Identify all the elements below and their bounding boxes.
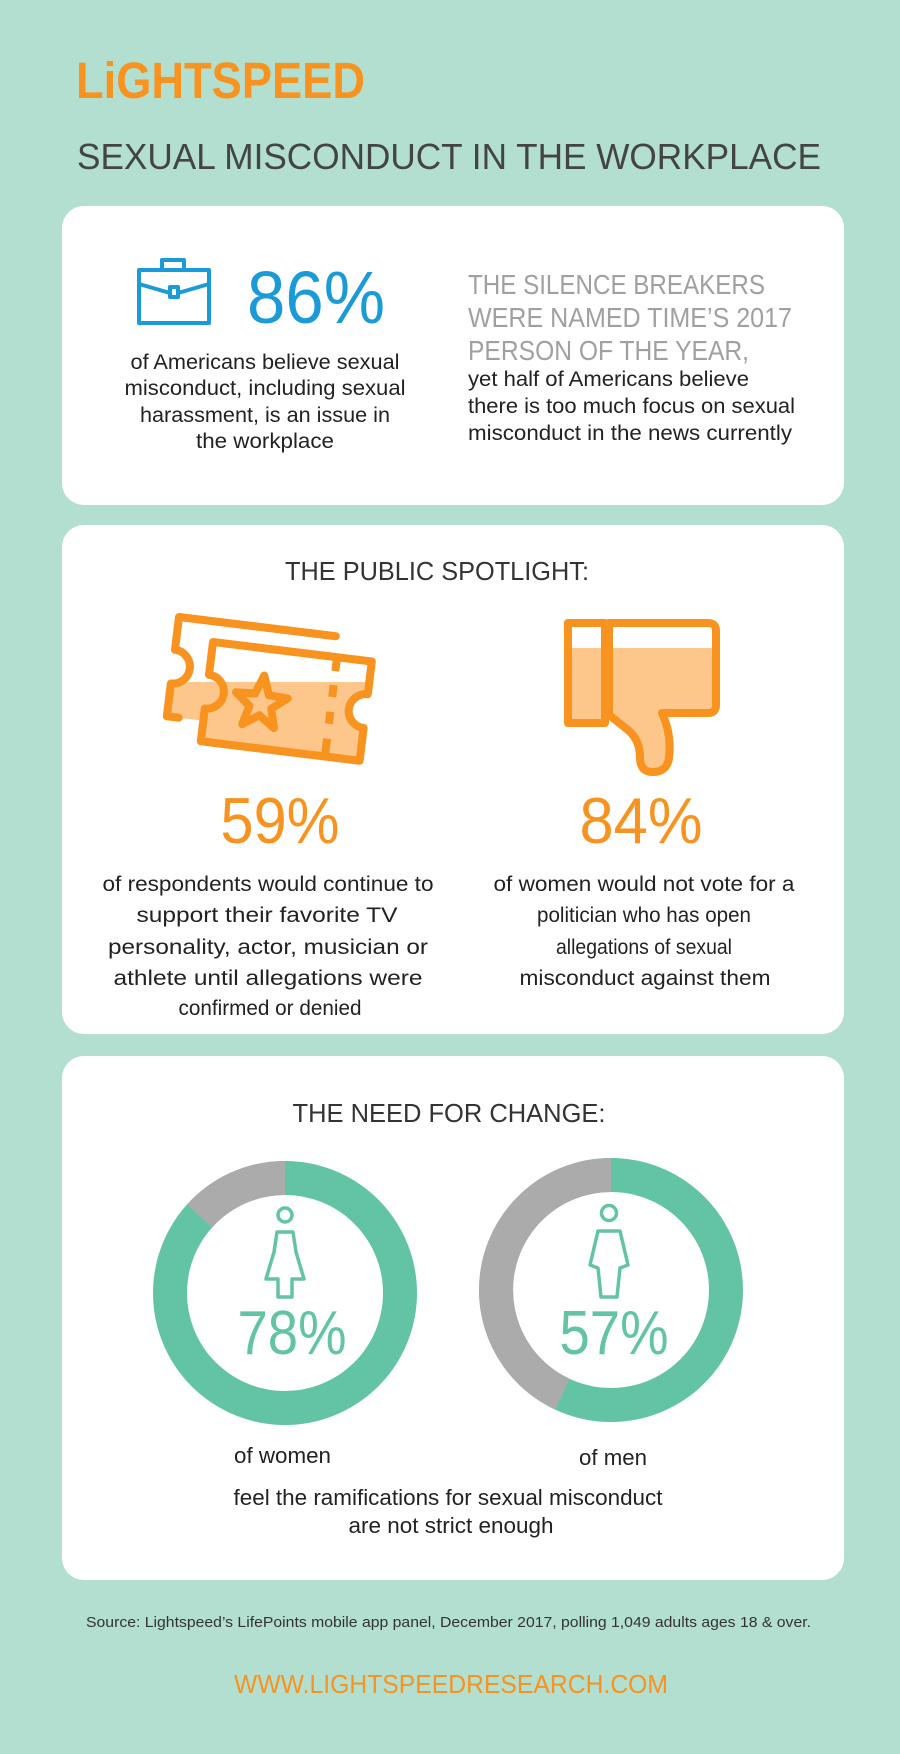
stat: 86%: 86% bbox=[247, 256, 385, 339]
label: of women: of women bbox=[234, 1443, 331, 1468]
text: conclusion bbox=[234, 1485, 662, 1538]
icon: man bbox=[590, 1206, 628, 1297]
text: silence breakers body: yet half of Americans believe bbox=[468, 368, 749, 391]
text: 59% description: support their favorite TV bbox=[136, 904, 398, 927]
icon: tickets bbox=[167, 617, 372, 761]
website url: WWW.LIGHTSPEEDRESEARCH.COM bbox=[234, 1669, 668, 1699]
text: silence breakers body: there is too much focus on sexual bbox=[468, 395, 795, 418]
stat: 57%: 57% bbox=[560, 1299, 668, 1368]
panel: intro stats bbox=[62, 206, 844, 505]
text: 86% description: misconduct, including sexual bbox=[124, 377, 406, 400]
text: 84% description: allegations of sexual bbox=[556, 936, 732, 959]
stat: 59%: 59% bbox=[220, 784, 340, 857]
icon: briefcase bbox=[139, 260, 209, 323]
text: 84% description bbox=[494, 873, 795, 990]
text: silence breakers body bbox=[468, 368, 795, 445]
text: 86% description: harassment, is an issue in bbox=[140, 404, 390, 427]
panel: the need for change bbox=[62, 1056, 844, 1580]
text: 84% description: politician who has open bbox=[537, 904, 751, 927]
stat: 84%: 84% bbox=[580, 784, 702, 857]
text: 84% description: of women would not vote for a bbox=[494, 873, 795, 896]
donut chart: men 57% bbox=[496, 1175, 726, 1405]
panel: the public spotlight bbox=[62, 525, 844, 1034]
label: of men: of men bbox=[579, 1445, 647, 1470]
text: silence breakers heading bbox=[468, 269, 792, 366]
text: silence breakers heading: PERSON OF THE YEAR, bbox=[468, 335, 749, 366]
logo: LiGHTSPEED bbox=[76, 52, 365, 109]
text: 59% description: confirmed or denied bbox=[178, 997, 362, 1020]
text: 59% description: personality, actor, musician or bbox=[108, 936, 428, 959]
heading: public spotlight: THE PUBLIC SPOTLIGHT: bbox=[285, 556, 589, 586]
text: conclusion: feel the ramifications for sexual misconduct bbox=[234, 1485, 662, 1510]
text: 59% description bbox=[102, 873, 434, 1020]
text: silence breakers heading: WERE NAMED TIME’S 2017 bbox=[468, 302, 792, 333]
source note: Source: Lightspeed’s LifePoints mobile app panel, December 2017, polling 1,049 adults ages 18 & over. bbox=[86, 1614, 811, 1631]
text: 84% description: misconduct against them bbox=[520, 967, 770, 990]
text: silence breakers body: misconduct in the news currently bbox=[468, 422, 793, 445]
text: 86% description: the workplace bbox=[196, 430, 334, 453]
text: 86% description bbox=[124, 351, 406, 453]
icon: thumbs down bbox=[568, 623, 716, 772]
text: 59% description: athlete until allegations were bbox=[114, 967, 422, 990]
text: 59% description: of respondents would continue to bbox=[102, 873, 434, 896]
donut chart: women 78% bbox=[170, 1178, 400, 1408]
icon: woman bbox=[266, 1208, 304, 1297]
text: conclusion: are not strict enough bbox=[348, 1513, 554, 1538]
text: silence breakers heading: THE SILENCE BREAKERS bbox=[468, 269, 765, 300]
text: 86% description: of Americans believe sexual bbox=[130, 351, 400, 374]
heading: need for change: THE NEED FOR CHANGE: bbox=[292, 1098, 606, 1128]
title: SEXUAL MISCONDUCT IN THE WORKPLACE bbox=[77, 136, 821, 177]
stat: 78%: 78% bbox=[238, 1299, 346, 1368]
